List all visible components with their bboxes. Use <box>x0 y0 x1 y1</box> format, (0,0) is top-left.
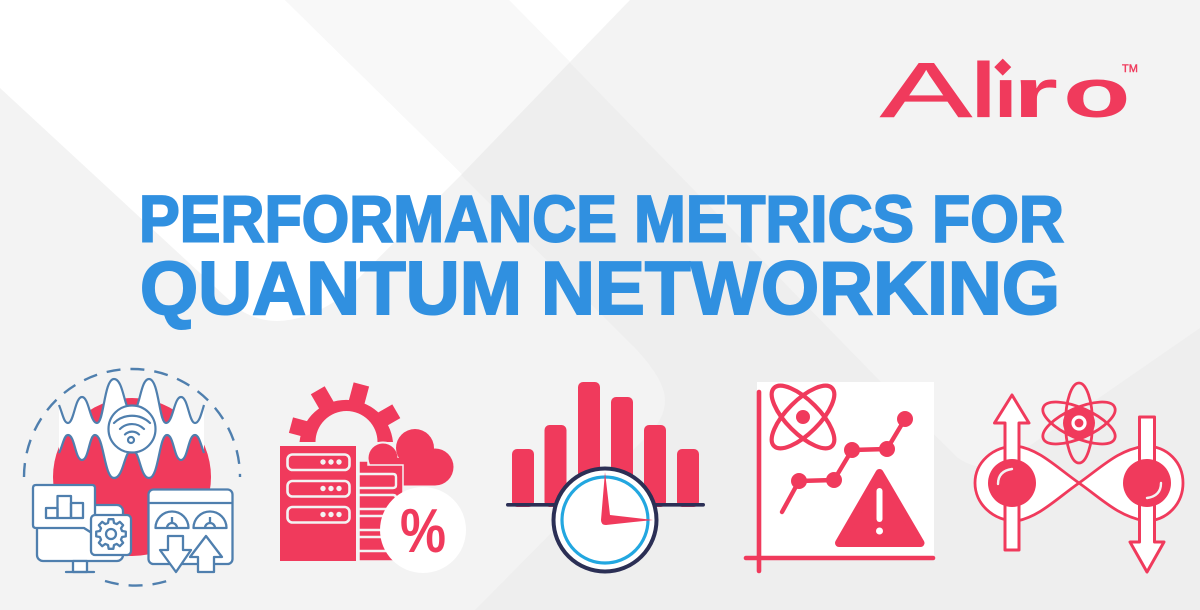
logo <box>880 46 1138 134</box>
icon: server, cloud and percent <box>280 382 466 573</box>
white panel <box>757 382 934 560</box>
signal wave <box>59 379 204 478</box>
logo: r <box>1013 54 1058 132</box>
down arrow <box>1130 417 1164 572</box>
main server <box>280 446 356 561</box>
cloud <box>368 429 454 486</box>
percent badge: % <box>400 497 446 566</box>
icon: entangled qubits <box>975 383 1183 572</box>
monitor with chart and gear <box>33 485 131 572</box>
title line 1: METRICS <box>634 182 914 256</box>
up arrow <box>994 395 1029 550</box>
warning triangle <box>839 473 920 543</box>
atom <box>762 376 844 458</box>
logo: A <box>880 46 972 134</box>
title line 1: PERFORMANCE <box>139 182 617 256</box>
left qubit <box>988 459 1036 507</box>
speed panel with gauges and arrows <box>148 490 232 572</box>
red backing circle <box>53 398 211 556</box>
icon: chart with atom and warning <box>746 376 934 571</box>
wifi badge <box>108 406 156 452</box>
logo: i <box>994 54 1017 132</box>
bars <box>512 382 699 507</box>
icon: network monitoring <box>24 369 240 586</box>
title <box>139 182 1064 330</box>
title line 2: NETWORKING <box>541 246 1060 330</box>
logo: o <box>1063 54 1131 132</box>
logo: TM <box>1122 63 1138 75</box>
clock <box>554 468 656 572</box>
infinity loop <box>975 446 1183 521</box>
baseline <box>506 503 705 507</box>
dashed orbit <box>24 369 240 586</box>
trend line <box>782 411 913 512</box>
second server <box>359 461 403 561</box>
logo: l <box>971 46 996 134</box>
gear <box>289 382 400 442</box>
atom <box>1037 383 1121 463</box>
right qubit <box>1123 459 1171 507</box>
icon: bar chart with clock <box>506 382 705 572</box>
percent badge <box>380 487 466 573</box>
axes <box>746 392 933 571</box>
title line 2: QUANTUM <box>140 246 522 330</box>
title line 1: FOR <box>932 182 1064 256</box>
